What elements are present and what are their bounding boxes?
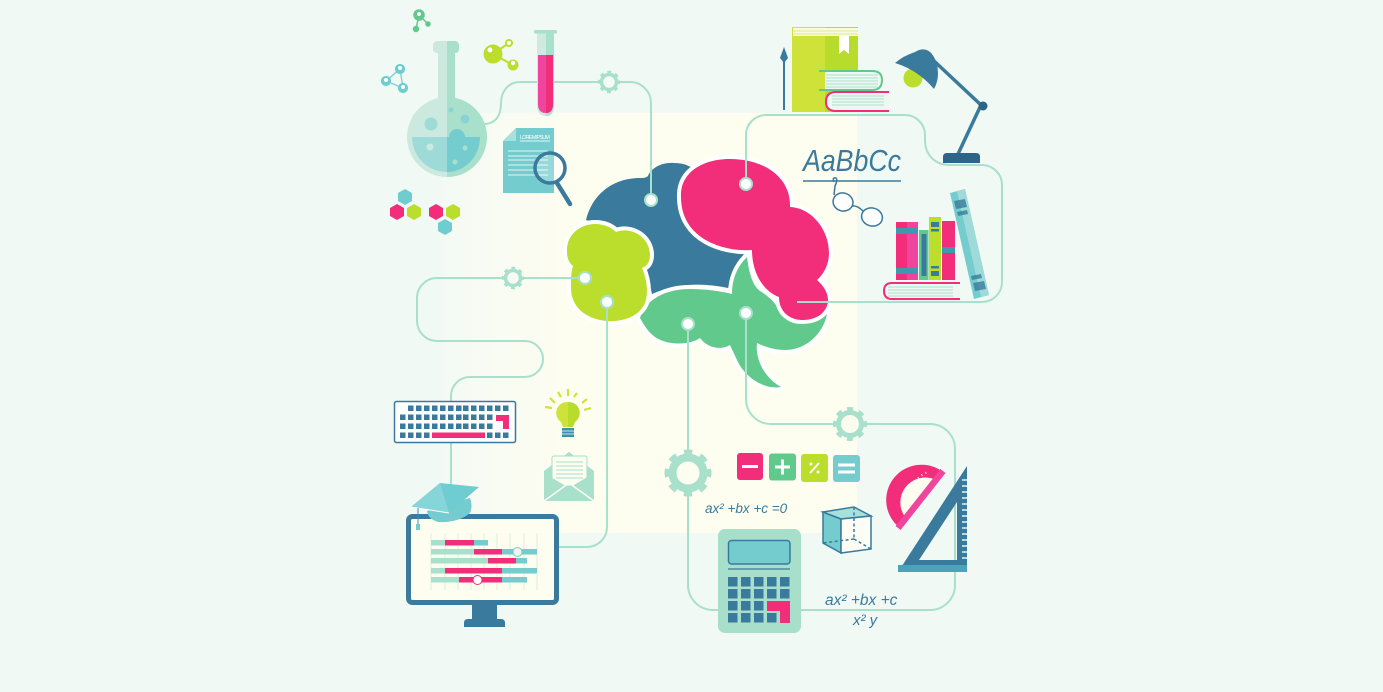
brain xyxy=(567,159,829,387)
icon: envelope xyxy=(544,452,594,501)
icon: pen nib xyxy=(780,47,788,110)
document label: LOREM IPSUM xyxy=(520,135,550,141)
connector nodes xyxy=(579,178,752,330)
icon: test tube xyxy=(534,30,557,116)
icon: set square xyxy=(898,466,967,572)
brain: blue lobe xyxy=(586,163,760,294)
icon: shelf of books xyxy=(884,189,989,299)
icon: hexagons xyxy=(390,189,460,235)
underline with glasses xyxy=(803,178,901,228)
bar chart rows xyxy=(431,540,537,584)
icon: large gear bottom xyxy=(668,452,708,494)
icon: molecule lime xyxy=(484,40,518,70)
brain: green lobe xyxy=(640,257,827,387)
icon: calculator xyxy=(718,529,801,633)
equation: quadratic: ax² +bx +c =0 xyxy=(705,501,788,516)
icon: cube xyxy=(823,507,871,553)
heading: AaBbCc: AaBbCc xyxy=(801,143,901,178)
icon: small gear left xyxy=(504,268,522,288)
icon: medium gear right xyxy=(836,410,864,438)
icon: flask xyxy=(407,41,487,177)
icon: protractor xyxy=(886,465,943,528)
icon: graduation cap xyxy=(411,483,479,530)
icon: molecule green xyxy=(414,10,430,32)
brain: lime lobe xyxy=(567,224,650,321)
icon: document with magnifier xyxy=(503,128,570,204)
equation: calculator side: ax² +bx +c xyxy=(825,592,898,609)
equation: x squared y: x² y xyxy=(852,612,879,629)
icon: monitor with bar chart xyxy=(408,516,556,627)
brain: pink lobe xyxy=(681,159,829,320)
connector lines xyxy=(417,82,1002,610)
icon: molecule cyan xyxy=(382,64,408,92)
icon: small gear top xyxy=(600,72,618,92)
icon: light bulb xyxy=(545,389,591,437)
central pale square xyxy=(437,113,857,533)
icon: math operator tiles xyxy=(737,453,860,482)
icon: keyboard xyxy=(394,402,516,442)
icon: book stack xyxy=(792,27,889,112)
icon: desk lamp xyxy=(895,49,988,163)
